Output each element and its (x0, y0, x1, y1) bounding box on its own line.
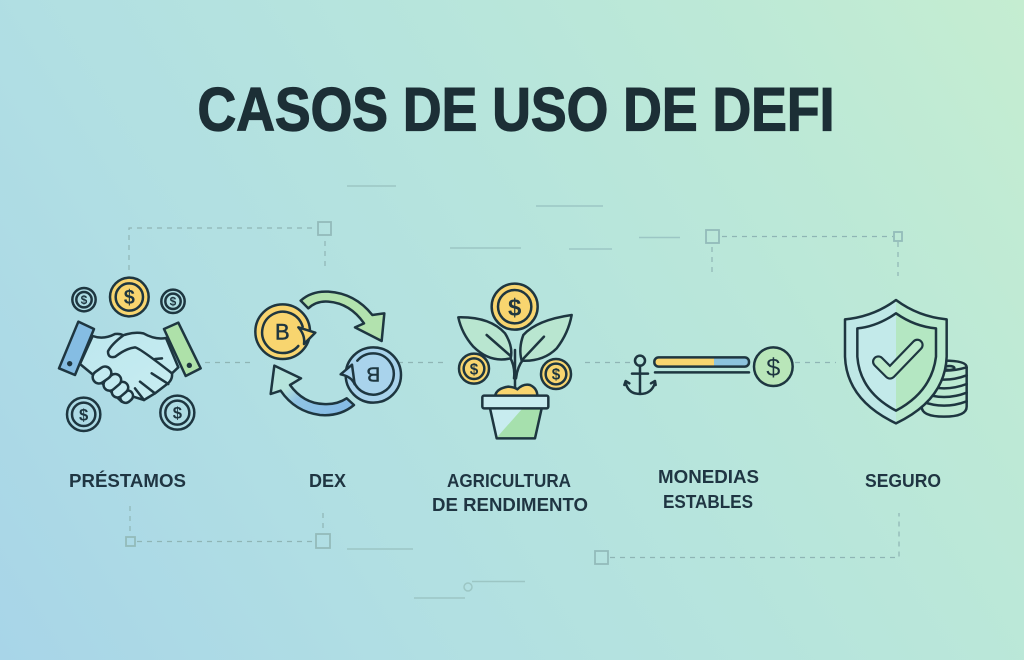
connector: top right bracket (706, 230, 902, 276)
panel: monedas estables (624, 347, 793, 512)
decorative line segments (347, 186, 680, 598)
icon: anchor, peg bar and dollar coin (624, 347, 793, 394)
icon: handshake with coins: $ (124, 287, 135, 309)
icon: plant with coins in a pot: $ (508, 294, 521, 321)
icon: plant with coins in a pot (458, 284, 572, 438)
icon: token swap arrows (255, 292, 401, 415)
icon: token swap arrows: B (275, 320, 290, 345)
icon: handshake with coins: $ (173, 404, 183, 423)
label: seguro: SEGURO (865, 470, 941, 491)
icon: handshake with coins (59, 278, 201, 431)
label: dex: DEX (309, 470, 347, 491)
label: de rendimento: DE RENDIMENTO (432, 494, 588, 515)
label: préstamos: PRÉSTAMOS (69, 470, 186, 491)
connector: horizontal links between icons (205, 362, 836, 364)
icon: anchor, peg bar and dollar coin: $ (766, 354, 780, 382)
label: monedias: MONEDIAS (658, 466, 759, 487)
connector: top left bracket (129, 222, 331, 270)
icon: handshake with coins: $ (170, 295, 177, 309)
connector: bottom left bracket (126, 506, 330, 548)
icon: shield with check and coin stack (845, 300, 967, 423)
panel: seguro (845, 300, 967, 491)
label: estables: ESTABLES (663, 491, 753, 512)
title: CASOS DE USO DE DEFI (198, 76, 834, 144)
connector: bottom right bracket (595, 513, 899, 564)
label: agricultura: AGRICULTURA (447, 470, 571, 491)
panel: préstamos (59, 278, 201, 491)
panel: dex (255, 292, 401, 491)
icon: handshake with coins: $ (81, 293, 88, 307)
panel: agricultura de rendimento (432, 284, 588, 515)
icon: handshake with coins: $ (79, 405, 89, 424)
icon: plant with coins in a pot: $ (552, 367, 561, 384)
icon: plant with coins in a pot: $ (470, 361, 479, 378)
icon: token swap arrows: B (366, 363, 380, 386)
